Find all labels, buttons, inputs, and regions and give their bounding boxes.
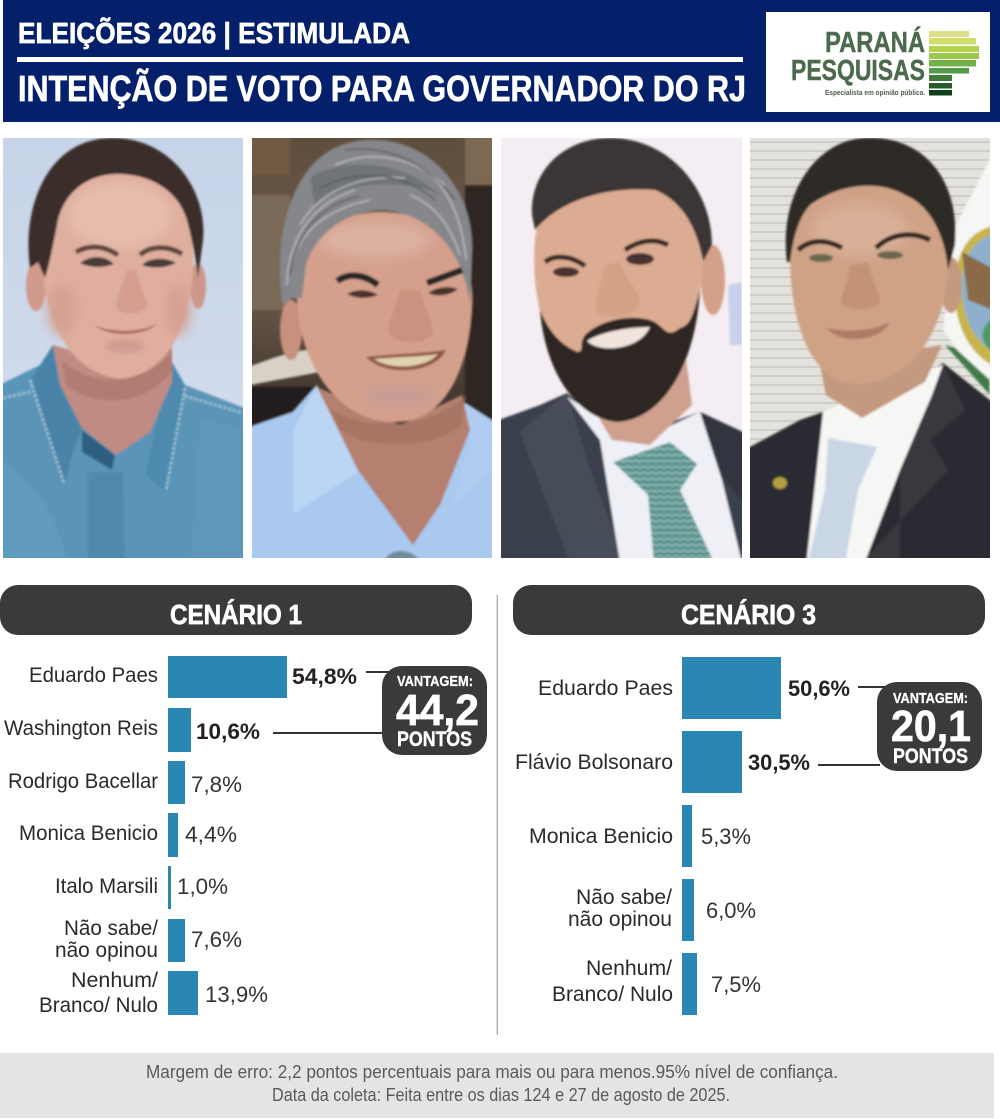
row: Eduardo Paes: Eduardo Paes xyxy=(29,664,158,687)
portrait: Washington Reis xyxy=(252,138,492,558)
logo: Paraná Pesquisas: PESQUISAS xyxy=(791,55,925,87)
callout: vantagem 44,2 pontos: 44,2 xyxy=(396,686,479,735)
brows and eyes xyxy=(337,276,378,285)
callout: vantagem 20,1 pontos: VANTAGEM: xyxy=(893,690,968,707)
panel: cenário 3 xyxy=(513,585,985,1015)
heading: election and poll type: ELEIÇÕES 2026 | ESTIMULADA xyxy=(18,16,410,50)
row: Washington Reis xyxy=(4,708,260,752)
row: Rodrigo Bacellar xyxy=(8,761,242,804)
callout: vantagem 20,1 pontos: PONTOS xyxy=(893,745,968,768)
row: Nenhum: Branco/ Nulo xyxy=(39,994,158,1017)
logo: Paraná Pesquisas: PARANÁ xyxy=(825,25,925,59)
row: Não sabe: não opinou xyxy=(55,939,158,962)
row: Eduardo Paes: Eduardo Paes xyxy=(538,677,673,700)
row: Monica Benicio xyxy=(529,805,751,867)
row: Não sabe: não opinou xyxy=(568,908,672,931)
portrait: Rodrigo Bacellar xyxy=(501,138,742,558)
logo: Paraná Pesquisas: Especialista em opinião pública. xyxy=(825,88,925,97)
neck xyxy=(820,345,942,418)
shirt collar xyxy=(32,345,82,484)
face xyxy=(26,261,46,311)
heading: cenário 3: CENÁRIO 3 xyxy=(681,599,816,630)
hair xyxy=(280,140,472,305)
row: Washington Reis: Washington Reis xyxy=(4,717,158,740)
row: Flávio Bolsonaro: 30,5% xyxy=(748,750,810,775)
logo: Paraná Pesquisas xyxy=(766,12,990,112)
row: Eduardo Paes: 50,6% xyxy=(788,676,850,701)
row: Não sabe: Não sabe/ xyxy=(576,886,672,909)
face xyxy=(532,188,704,354)
background car xyxy=(252,348,318,387)
row: Nenhum: Nenhum/ xyxy=(71,969,158,992)
panel: cenário 1 xyxy=(0,585,487,1017)
shirt xyxy=(252,384,492,558)
nose xyxy=(596,262,640,317)
neck xyxy=(598,358,694,446)
beard xyxy=(540,290,700,422)
portrait: Flávio Bolsonaro xyxy=(750,138,990,558)
row: Italo Marsili xyxy=(55,866,228,909)
neck xyxy=(317,387,470,545)
suit xyxy=(750,362,990,558)
column divider xyxy=(496,595,498,1035)
row: Nenhum: Nenhum/ xyxy=(586,957,672,980)
nose xyxy=(841,262,880,309)
ear xyxy=(701,245,725,315)
face xyxy=(280,300,302,360)
row: Nenhum xyxy=(552,953,761,1015)
callout: vantagem 44,2 pontos: PONTOS xyxy=(397,728,472,751)
row: Italo Marsili: 1,0% xyxy=(177,874,228,899)
row: Nenhum: 13,9% xyxy=(205,982,268,1007)
row: Não sabe xyxy=(55,917,242,962)
face xyxy=(790,172,950,384)
row: Washington Reis: 10,6% xyxy=(196,719,260,744)
row: Eduardo Paes: 54,8% xyxy=(292,664,357,689)
callout: vantagem 44,2 pontos xyxy=(273,666,487,755)
row: Nenhum: 7,5% xyxy=(711,972,761,997)
ear xyxy=(940,257,962,313)
row: Monica Benicio: 5,3% xyxy=(701,824,751,849)
row: Rodrigo Bacellar: 7,8% xyxy=(191,772,242,797)
callout: vantagem 44,2 pontos: VANTAGEM: xyxy=(397,673,473,690)
shirt xyxy=(566,396,742,558)
neck xyxy=(53,335,172,455)
tie xyxy=(808,438,877,558)
heading: cenário 1: CENÁRIO 1 xyxy=(170,599,302,630)
mouth xyxy=(94,324,157,334)
flag emblem xyxy=(954,226,990,366)
footer: methodology note: Data da coleta: Feita entre os dias 124 e 27 de agosto de 2025. xyxy=(272,1084,730,1105)
row: Não sabe: 6,0% xyxy=(706,898,756,923)
eyes and brows xyxy=(76,247,118,255)
callout: vantagem 20,1 pontos xyxy=(818,682,982,771)
heading: cenário 1 xyxy=(0,585,472,635)
footer: methodology note: Margem de erro: 2,2 pontos percentuais para mais ou para menos.95% nível de confiança. xyxy=(146,1061,838,1082)
row: Flávio Bolsonaro xyxy=(515,731,810,793)
mouth xyxy=(827,322,890,339)
row: Italo Marsili: Italo Marsili xyxy=(55,875,158,898)
glasses at collar xyxy=(385,550,420,558)
shirt xyxy=(805,365,943,575)
row: Flávio Bolsonaro: Flávio Bolsonaro xyxy=(515,751,673,774)
background sign xyxy=(728,282,742,345)
row: Não sabe: Não sabe/ xyxy=(64,917,158,940)
row: Nenhum xyxy=(39,969,268,1017)
row: Monica Benicio: Monica Benicio xyxy=(529,825,673,848)
suit xyxy=(501,392,742,558)
eyes and brows xyxy=(798,242,842,250)
lapel pin xyxy=(773,477,787,489)
row: Não sabe: 7,6% xyxy=(191,927,242,952)
hair xyxy=(786,138,955,270)
tie xyxy=(612,441,714,558)
nose xyxy=(389,290,433,342)
heading: cenário 3 xyxy=(513,585,985,635)
callout: vantagem 20,1 pontos: 20,1 xyxy=(891,702,971,751)
portrait: Eduardo Paes xyxy=(3,138,243,558)
header banner xyxy=(3,0,1000,122)
row: Eduardo Paes xyxy=(29,656,357,698)
row: Monica Benicio: Monica Benicio xyxy=(19,822,158,845)
header divider xyxy=(17,57,743,62)
row: Eduardo Paes xyxy=(538,657,850,719)
row: Monica Benicio xyxy=(19,813,237,857)
row: Monica Benicio: 4,4% xyxy=(185,822,237,847)
denim shirt xyxy=(3,358,243,558)
row: Rodrigo Bacellar: Rodrigo Bacellar xyxy=(8,770,158,793)
hair xyxy=(532,138,712,262)
footer: methodology note xyxy=(0,1053,994,1118)
smile xyxy=(587,327,650,348)
eyes and brows xyxy=(545,257,585,266)
hair xyxy=(28,138,203,278)
title: INTENÇÃO DE VOTO PARA GOVERNADOR DO RJ xyxy=(18,67,746,109)
row: Nenhum: Branco/ Nulo xyxy=(552,983,673,1006)
state flag xyxy=(942,158,990,396)
row: Não sabe xyxy=(568,879,756,941)
smile xyxy=(366,350,446,370)
nose xyxy=(116,270,147,314)
